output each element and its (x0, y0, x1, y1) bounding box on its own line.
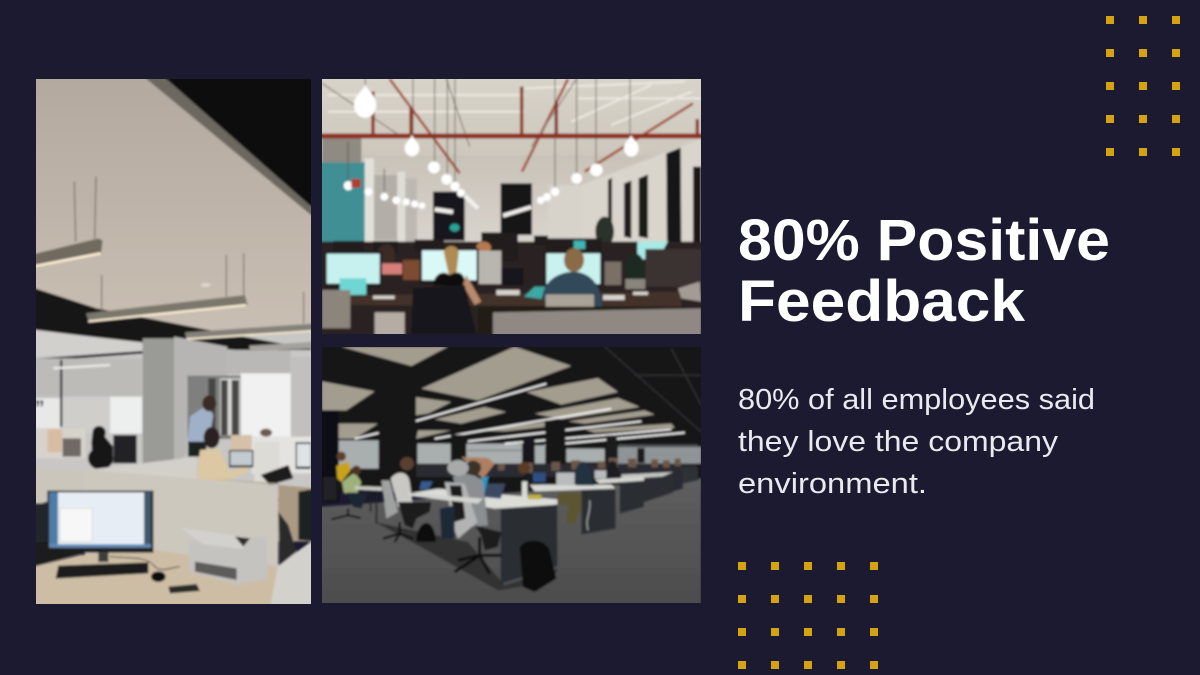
lower dark (478, 307, 705, 337)
white chair (445, 460, 501, 574)
main cubicle partition (85, 469, 278, 567)
smoke detector (201, 283, 211, 287)
bulb 7 (624, 135, 639, 157)
desk surface (30, 542, 317, 608)
woman top (433, 272, 466, 287)
bulb 8 (590, 164, 603, 176)
desktop left strip (49, 492, 58, 544)
dark item right (298, 488, 317, 542)
dark bag (323, 477, 337, 500)
bulb 3 (428, 161, 440, 173)
photo: loft office with bulbs and red pipes (318, 75, 711, 338)
body text: they love the company (738, 426, 1059, 458)
left hall windows (374, 175, 397, 240)
red pipe main (318, 128, 705, 143)
left small laptop (30, 503, 50, 543)
woman at centre (433, 246, 481, 305)
far right screen (297, 444, 310, 467)
green shirt (342, 472, 361, 494)
man torso (453, 474, 488, 527)
far head centre (476, 242, 491, 254)
printer (180, 528, 267, 585)
monitor screen (49, 492, 151, 548)
dark shirt person (523, 472, 540, 485)
left white wall (35, 398, 61, 428)
teal reflection (450, 224, 460, 232)
light 1 strip (30, 253, 101, 267)
desk 5 (530, 461, 616, 535)
backpack 3 (440, 505, 455, 539)
window 2 (501, 183, 532, 235)
phone (168, 584, 200, 593)
dots: bottom left of text (738, 562, 878, 669)
person legs desk 5 (558, 493, 581, 524)
black binder (261, 465, 293, 485)
woman hair (204, 427, 220, 448)
papers (373, 290, 648, 300)
man arms (461, 457, 495, 479)
dark storage (113, 435, 137, 463)
monitor C bezel (544, 251, 603, 286)
bulb 16 (392, 196, 400, 204)
chair back (546, 294, 594, 308)
man head (465, 461, 481, 475)
bulb 6 (457, 189, 465, 197)
bulb 14 (364, 188, 372, 196)
beige box (231, 435, 252, 450)
ceiling (318, 75, 711, 155)
yellow shirt (336, 461, 351, 482)
column left (322, 410, 339, 502)
ceiling edge (142, 75, 317, 215)
panel 2 (322, 381, 375, 410)
green head (352, 466, 361, 475)
panel 12 (585, 424, 675, 433)
right window 5 (608, 178, 612, 232)
desk far 2 (661, 470, 683, 495)
desk 2 top (408, 493, 483, 504)
monitor A bezel (325, 252, 382, 286)
seated person back-left (91, 426, 113, 463)
left desk (355, 486, 382, 491)
plant right (625, 253, 645, 283)
floor shadow (375, 522, 558, 590)
desk 4 top (595, 477, 644, 484)
panel 4 (526, 378, 618, 405)
monitor B (420, 248, 479, 283)
printer paper dark slot (235, 537, 250, 547)
window 1 (433, 192, 465, 241)
desk far 3 top (620, 472, 673, 479)
panel 5 (415, 397, 451, 415)
far windows (339, 440, 605, 469)
man trousers (188, 442, 206, 457)
lower office wall (30, 332, 317, 498)
bald man (606, 461, 622, 477)
photo: office with hanging lights and cubicles (30, 75, 317, 608)
ceiling (30, 75, 317, 342)
dark equipment (501, 268, 523, 285)
right window 3 (639, 174, 648, 238)
person in white shirt (391, 457, 431, 529)
far desks (595, 467, 698, 514)
hall panel (405, 178, 417, 242)
desk far 3 (643, 473, 673, 503)
woman arm (463, 275, 481, 305)
chair 2 base (383, 522, 413, 542)
right white shelf (270, 542, 317, 608)
light 3 strip (187, 331, 317, 339)
man head (202, 395, 216, 411)
white shirt (391, 473, 413, 507)
far woman shirt (382, 263, 402, 274)
desk far 1 (680, 467, 698, 484)
yellow person head (337, 452, 346, 461)
window dialog (60, 508, 92, 542)
door panes (208, 378, 239, 435)
right window 1 (666, 148, 681, 248)
monitor C screen (546, 253, 600, 284)
panel 1 (341, 347, 448, 366)
seated person head (88, 447, 113, 470)
crowd band (416, 464, 696, 477)
woman shirt (197, 448, 248, 482)
right window (241, 373, 291, 437)
white panel (254, 442, 279, 483)
cables (110, 557, 180, 570)
photo: large dark open-plan office (318, 342, 711, 609)
chair back (445, 482, 477, 539)
desk 5 base (581, 487, 616, 535)
seated woman (197, 427, 248, 482)
column 5 (523, 437, 535, 464)
exit sign (351, 179, 361, 188)
dark beams (605, 347, 701, 432)
far partition (30, 467, 83, 507)
bulb 10 (551, 187, 559, 196)
monitor stand (98, 553, 108, 562)
dark desk strip (30, 538, 85, 568)
light 1 hangers (74, 177, 96, 242)
right teal monitor (637, 241, 668, 260)
desk 5 top (530, 485, 616, 491)
desktop right strip (144, 492, 151, 544)
plant pot (625, 279, 645, 289)
person green (331, 466, 368, 519)
taskbar (49, 544, 151, 548)
light fixtures (355, 384, 685, 445)
man in denim (542, 248, 602, 307)
monitor (47, 491, 153, 562)
bulb 17 (403, 198, 410, 206)
laptop (229, 450, 253, 467)
teal left area (318, 162, 365, 246)
floor (318, 479, 701, 609)
light 2 (86, 295, 248, 322)
drawer unit (375, 312, 405, 336)
panel 11 (478, 422, 545, 431)
curtain (548, 185, 581, 238)
printer slot (195, 562, 237, 580)
back person head (260, 429, 272, 437)
blue shirt person (479, 476, 489, 493)
clutter magazines (63, 438, 81, 457)
left desk leg (371, 490, 376, 524)
laptops (556, 470, 606, 485)
main desk top (408, 489, 557, 509)
bulb 19 (419, 202, 425, 209)
main desk base (501, 505, 557, 584)
pillar right face (174, 337, 227, 463)
quote marks: ” (35, 397, 45, 419)
tablet teal (524, 287, 545, 299)
woman hair (444, 246, 459, 277)
partition upper (87, 457, 197, 480)
monitor A (325, 252, 382, 286)
monitor A screen (327, 254, 380, 284)
far desk band (318, 242, 711, 338)
heading (738, 208, 1110, 334)
chair 2 (381, 480, 398, 519)
column main (379, 381, 416, 475)
right window 4 (624, 181, 631, 238)
chair headrest (447, 460, 469, 476)
light 4 (249, 342, 317, 351)
monitor C (544, 251, 603, 286)
stool base (331, 509, 361, 519)
body text: 80% of all employees said (738, 384, 1095, 416)
panel 8 (568, 410, 655, 424)
man with hands behind head (453, 457, 501, 550)
foreground surface (493, 308, 701, 338)
dots: top right (1106, 16, 1180, 156)
desk 5 cable (587, 500, 590, 530)
monitor bezel (47, 491, 153, 553)
crowd heads (498, 458, 681, 473)
bulb cords (348, 78, 630, 193)
left chair (322, 290, 350, 328)
wood desk (207, 478, 317, 542)
light 3 (185, 323, 317, 340)
bulb 13 (344, 181, 353, 190)
panel 7 (535, 398, 640, 419)
bulb 15 (380, 193, 388, 201)
bulb 18 (411, 200, 418, 208)
far wall right (618, 447, 701, 464)
bottle (522, 481, 527, 502)
bulb 4 (441, 174, 452, 185)
body text (738, 384, 1095, 500)
printer body (188, 537, 267, 585)
door (187, 376, 241, 439)
person yellow (323, 452, 351, 500)
light 3 hanger (302, 292, 305, 323)
clutter board (47, 429, 62, 452)
red pipe diagonals (390, 79, 693, 173)
column 2 (397, 172, 405, 243)
light 5 (53, 365, 110, 368)
dark rail (35, 352, 143, 360)
bulb 9 (571, 173, 582, 184)
ceiling beams (322, 79, 576, 147)
left blinds (35, 358, 142, 397)
door glass (220, 378, 240, 435)
jeans (346, 493, 368, 509)
lower ceiling (36, 330, 144, 355)
red pipe verticals (373, 87, 697, 137)
monitor B screen (422, 250, 477, 280)
bulbs (344, 84, 639, 209)
panel 9 (338, 424, 378, 439)
man shirt (187, 405, 213, 445)
food tray (528, 495, 541, 499)
chair inner (450, 485, 465, 522)
black ceiling band (30, 287, 317, 350)
right clutter (678, 282, 701, 302)
silver monitor back (479, 251, 501, 284)
heading: 80% Positive (738, 208, 1110, 273)
dark ceiling (318, 342, 711, 492)
panel 10 (416, 430, 451, 439)
left dark ceiling (322, 138, 361, 162)
bulb 1 (354, 84, 376, 118)
right desk clutter (605, 262, 621, 285)
mouse (151, 571, 166, 582)
column 4 (545, 420, 565, 464)
far woman head (378, 244, 395, 263)
panel 3 (421, 347, 571, 400)
column 7 (637, 448, 645, 463)
light 2 hangers (102, 253, 244, 312)
monitor B bezel (420, 248, 479, 283)
backpack (520, 541, 556, 592)
black ceiling corner (162, 75, 317, 207)
small laptop screen (533, 473, 546, 482)
body text: environment. (738, 468, 927, 500)
left desk clutter (35, 428, 85, 458)
paper stack (278, 512, 297, 565)
desk 4 (620, 479, 644, 514)
keyboard (56, 562, 148, 579)
back teal screen (574, 241, 585, 249)
man hair (564, 248, 584, 272)
wood chair (403, 260, 420, 280)
backpack 2 (416, 523, 436, 542)
bulb 11 (543, 193, 551, 201)
left wall lower (62, 397, 109, 433)
heading: Feedback (738, 269, 1026, 334)
person hair (518, 462, 530, 474)
ceiling streaks (328, 82, 701, 125)
white cubicle right (252, 437, 312, 473)
standing man (187, 395, 216, 457)
chair base (455, 537, 501, 574)
laptop teal (340, 278, 366, 296)
man legs (475, 525, 501, 550)
column 3 (451, 435, 465, 466)
head (400, 457, 414, 470)
right wall (581, 138, 701, 248)
light 1 (36, 238, 104, 266)
light 2 strip (88, 305, 246, 321)
far right monitor (296, 442, 311, 469)
plant (595, 217, 614, 247)
far right blinds (292, 357, 312, 437)
desk (350, 292, 681, 307)
laptop screen (230, 451, 252, 465)
panel 6 (435, 407, 506, 424)
reflected bulbs left (435, 196, 478, 212)
right dark monitor back (645, 249, 702, 287)
bulb 5 (450, 182, 460, 191)
reflected bulbs right (503, 207, 531, 216)
far fixtures (468, 445, 698, 450)
printer lid (180, 528, 248, 549)
pillar left face (143, 338, 174, 463)
column 6 (606, 435, 617, 462)
jacket on chair (411, 285, 476, 334)
bulb 2 (405, 134, 419, 156)
back monitors (333, 232, 601, 262)
small laptop desk 2 (419, 481, 433, 490)
bulb 12 (537, 197, 544, 204)
column 1 (365, 158, 374, 243)
main desk (408, 489, 557, 592)
legs (398, 502, 431, 529)
dark post (60, 360, 62, 427)
left window (110, 397, 142, 433)
ceiling panels (322, 347, 675, 439)
person at desk 5 (575, 461, 595, 485)
main laptop (483, 484, 505, 499)
right blinds (227, 350, 291, 374)
man shirt (542, 272, 602, 307)
right window 2 (693, 167, 701, 248)
back wall (318, 155, 711, 245)
